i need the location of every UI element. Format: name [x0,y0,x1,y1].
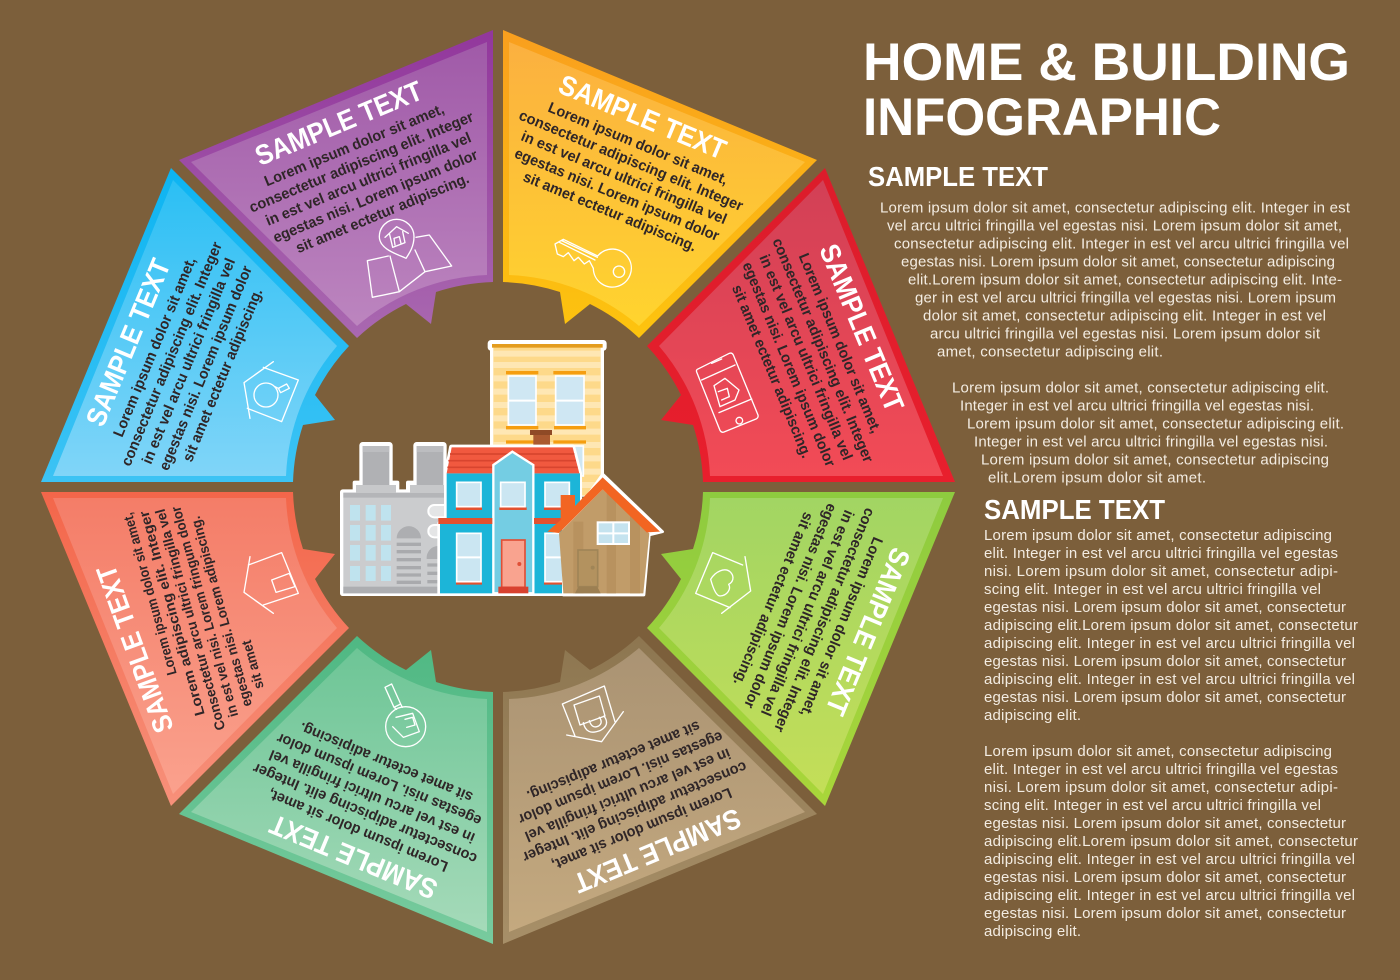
paragraph: block one: egestas nisi. Lorem ipsum dolor sit amet, consectetur [984,599,1346,616]
red text: egestas nisi. Lorem ipsum dolor [739,260,839,470]
yellow text [495,59,765,266]
paragraph: staggered second: Lorem ipsum dolor sit amet, consectetur adipiscing elit. [952,380,1329,396]
purple text: egestas nisi. Lorem ipsum dolor [271,146,481,246]
segment: sea green magnifier [179,636,501,944]
red text: SAMPLE TEXT [813,240,910,416]
red text: consectetur adipiscing elit. Integer [769,236,877,465]
yellow text: consectetur adipiscing elit. Integer [516,107,746,215]
paragraph: staggered second: Lorem ipsum dolor sit amet, consectetur adipiscing [981,452,1329,468]
yellow text: sit amet ectetur adipiscing. [521,168,699,255]
icon: key [555,239,631,287]
paragraph: block one: nisi. Lorem ipsum dolor sit amet, consectetur adipi- [984,563,1338,580]
paragraph: block one: adipiscing elit. Integer in est vel arcu ultrici fringilla vel [984,635,1355,652]
paragraph: block two: Lorem ipsum dolor sit amet, consectetur adipiscing [984,743,1332,760]
paragraph: block two: adipiscing elit. [984,923,1081,940]
paragraph: staggered second: Integer in est vel arcu ultrici fringilla vel egestas nisi. [974,434,1328,450]
paragraph: block two: egestas nisi. Lorem ipsum dolor sit amet, consectetur [984,869,1346,886]
paragraph: staggered second: Integer in est vel arcu ultrici fringilla vel egestas nisi. [960,398,1314,414]
blue text: in est vel arcu ultrici fringilla vel [139,256,239,466]
paragraph: block two [984,743,1358,940]
paragraph: staggered second: Lorem ipsum dolor sit amet, consectetur adipiscing elit. [967,416,1344,432]
paragraph: block one [984,527,1358,724]
paragraph: block two: nisi. Lorem ipsum dolor sit amet, consectetur adipi- [984,779,1338,796]
grey factory [340,442,452,596]
brown text: Lorem ipsum dolor sit amet, [549,784,734,873]
icon: house with magnifier [244,362,298,422]
yellow text: in est vel arcu ultrici fringilla vel [519,128,729,228]
blue two storey house [438,447,580,593]
paragraph: block one: egestas nisi. Lorem ipsum dolor sit amet, consectetur [984,689,1346,706]
blue text: SAMPLE TEXT [80,254,177,431]
icon: magnifier with house [385,684,426,747]
paragraph: staggered top: ger in est vel arcu ultrici fringilla vel egestas nisi. Lorem ipsum [915,290,1336,306]
paragraph: block one: elit. Integer in est vel arcu ultrici fringilla vel egestas [984,545,1338,562]
icon: map with pin [367,219,452,297]
green text: sit amet ectetur adipiscing. [730,510,817,688]
paragraph: block one: egestas nisi. Lorem ipsum dolor sit amet, consectetur [984,653,1346,670]
sea green text: consectetur adipiscing elit. Integer [250,759,480,867]
brown text: SAMPLE TEXT [569,802,745,899]
coral text: sit amet [238,638,267,691]
paragraph: staggered top: elit.Lorem ipsum dolor sit amet, consectetur adipiscing elit. Inte- [908,272,1342,288]
coral text: Consectetur arcu ultrici fringilla vel [152,507,228,732]
paragraph: staggered top: vel arcu ultrici fringilla vel egestas nisi. Lorem ipsum dolor sit amet, [887,218,1342,234]
brown text: consectetur adipiscing elit. Integer [520,758,749,866]
coral text [119,504,267,732]
paragraph: block one: adipiscing elit. [984,707,1081,724]
paragraph: block two: adipiscing elit. Integer in est vel arcu ultrici fringilla vel [984,887,1355,904]
paragraph: block two: egestas nisi. Lorem ipsum dolor sit amet, consectetur [984,905,1346,922]
sea green text [231,708,501,915]
segment: purple map [179,30,497,338]
icon: phone [696,353,758,432]
paragraph: staggered top: Lorem ipsum dolor sit amet, consectetur adipiscing elit. Integer in est [880,200,1351,216]
segment: blue search [41,168,349,490]
purple text: in est vel arcu ultrici fringilla vel [263,129,474,230]
paragraph: block two: elit. Integer in est vel arcu ultrici fringilla vel egestas [984,761,1338,778]
red text [718,216,925,486]
red text: Lorem ipsum dolor sit amet, [795,251,884,436]
icon: house with heart [696,553,751,613]
title: INFOGRAPHIC [863,88,1221,147]
brown text: in est vel arcu ultrici fringilla vel [522,744,733,845]
center illustration: buildings [340,340,663,596]
wooden house [547,474,663,595]
paragraph: staggered top: consectetur adipiscing elit. Integer in est vel arcu ultrici fringilla vel [894,236,1349,252]
green text [719,484,926,754]
coral text: egestas nisi. Lorem adipiscing. [187,515,255,709]
coral text: in est vel nisi. Lorem fringum dolor [167,504,241,719]
title: HOME & BUILDING [863,33,1350,92]
brown text: sit amet ectetur adipiscing. [524,717,703,804]
green text: in est vel arcu ultrici fringilla vel [757,508,857,718]
paragraph: staggered top: amet, consectetur adipiscing elit. [937,344,1163,360]
yellow apartment [488,340,607,497]
red text: sit amet ectetur adipiscing. [728,282,815,461]
purple text: Lorem ipsum dolor sit amet, [262,101,447,190]
sea green text: in est vel arcu ultrici fringilla vel [267,746,477,846]
red text: in est vel arcu ultrici fringilla vel [755,252,856,463]
coral text: Lorem ipsum dolor sit amet, [119,511,180,677]
blue text: Lorem ipsum dolor sit amet, [110,255,200,439]
blue text: sit amet ectetur adipiscing. [179,286,266,464]
green text: Lorem ipsum dolor sit amet, [796,535,886,719]
purple text: consectetur adipiscing elit. Integer [247,108,476,216]
purple text [227,60,497,267]
paragraph: block one: Lorem ipsum dolor sit amet, consectetur adipiscing [984,527,1332,544]
paragraph: block two: adipiscing elit.Lorem ipsum dolor sit amet, consectetur [984,833,1358,850]
yellow text: SAMPLE TEXT [554,69,731,166]
blue text: consectetur adipiscing elit. Integer [118,239,226,469]
paragraph: staggered top: arcu ultrici fringilla vel egestas nisi. Lorem ipsum dolor sit [930,326,1321,342]
paragraph: block two: egestas nisi. Lorem ipsum dolor sit amet, consectetur [984,815,1346,832]
segment: yellow key [495,30,817,338]
segment: coral house [41,492,349,806]
paragraph: staggered top [880,200,1351,360]
brown text [499,707,769,914]
purple text: sit amet ectetur adipiscing. [293,170,472,257]
icon: house outline [244,553,298,613]
paragraph: staggered top: dolor sit amet, consectetur adipiscing elit. Integer in est vel [923,308,1326,324]
green text: egestas nisi. Lorem ipsum dolor [740,501,840,711]
purple text: SAMPLE TEXT [251,75,427,172]
blue text [70,220,277,490]
sea green text: SAMPLE TEXT [265,808,442,905]
paragraph: staggered top: egestas nisi. Lorem ipsum dolor sit amet, consectetur adipiscing [901,254,1335,270]
yellow text: egestas nisi. Lorem ipsum dolor [512,145,722,245]
paragraph: block one: adipiscing elit.Lorem ipsum dolor sit amet, consectetur [984,617,1358,634]
segment: green heart [647,484,955,806]
coral text: Lorem adipiscing elit. Integer [135,509,208,718]
brown text: egestas nisi. Lorem ipsum dolor [515,728,725,828]
heading: second sample text: SAMPLE TEXT [984,494,1165,525]
paragraph: block two: scing elit. Integer in est vel arcu ultrici fringilla vel [984,797,1321,814]
paragraph: block two: adipiscing elit. Integer in est vel arcu ultrici fringilla vel [984,851,1355,868]
title [863,33,1350,147]
paragraph: staggered second: elit.Lorem ipsum dolor sit amet. [988,470,1206,486]
sea green text: sit amet ectetur adipiscing. [297,719,475,806]
paragraph: block one: adipiscing elit. Integer in est vel arcu ultrici fringilla vel [984,671,1355,688]
icon: house with lock [562,686,623,742]
sea green text: egestas nisi. Lorem ipsum dolor [274,729,484,829]
paragraph: block one: scing elit. Integer in est vel arcu ultrici fringilla vel [984,581,1321,598]
coral title: SAMPLE TEXT [90,561,180,737]
blue text: egestas nisi. Lorem ipsum dolor [156,263,256,473]
segment: red phone [647,168,955,486]
yellow text: Lorem ipsum dolor sit amet, [546,99,730,189]
paragraph: staggered second [952,380,1344,486]
heading: first sample text: SAMPLE TEXT [868,161,1048,192]
green text: consectetur adipiscing elit. Integer [770,505,878,735]
segment: brown lock [499,636,817,944]
green text: SAMPLE TEXT [819,543,916,720]
sea green text: Lorem ipsum dolor sit amet, [266,785,450,875]
